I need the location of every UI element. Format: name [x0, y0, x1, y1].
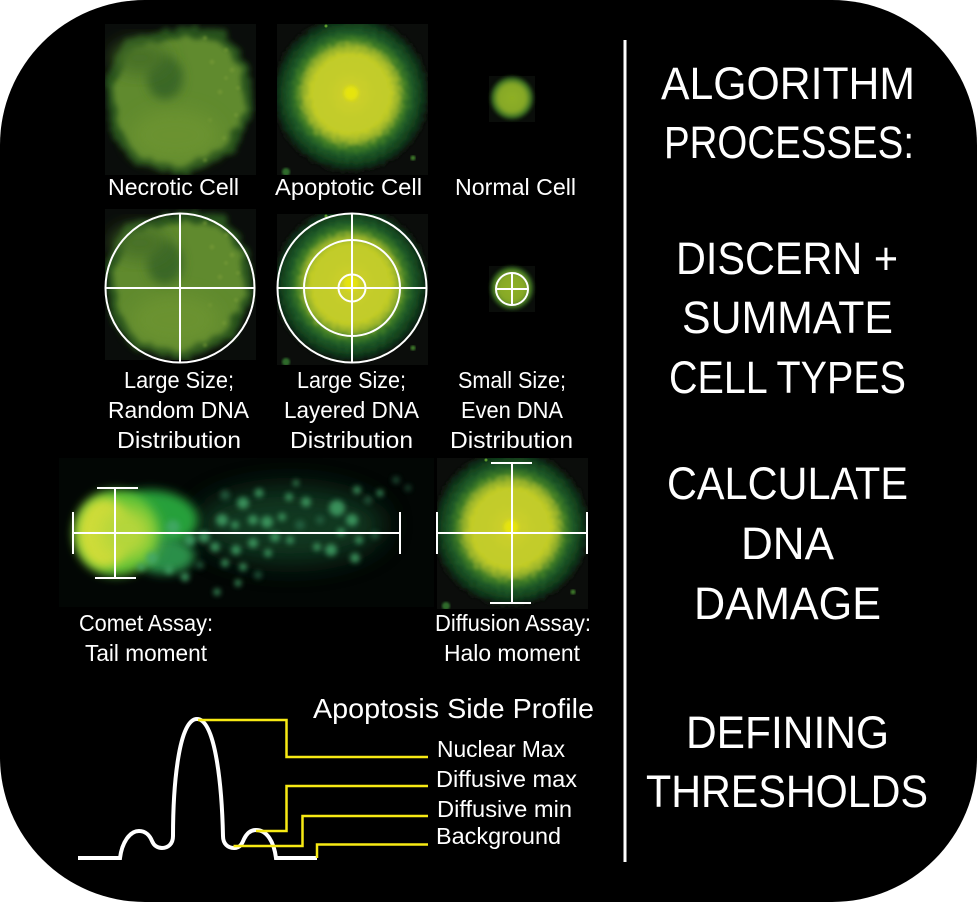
image: apoptotic cell: [272, 15, 430, 176]
caption: even DNA distribution: Distribution: [450, 427, 573, 453]
image: normal cell: [489, 76, 535, 122]
heading: algorithm processes: ALGORITHM: [661, 58, 915, 109]
diagram: apoptotic cell with layered rings: [272, 205, 430, 366]
caption: layered DNA distribution: Large Size;: [297, 367, 406, 393]
text: calculate DNA damage: DAMAGE: [694, 578, 881, 629]
label: diffusive max: Diffusive max: [436, 766, 578, 792]
heading: algorithm processes: PROCESSES:: [664, 117, 914, 168]
label: background: Background: [436, 823, 561, 849]
caption: apoptotic cell: Apoptotic Cell: [275, 174, 422, 200]
caption: layered DNA distribution: Distribution: [290, 427, 413, 453]
caption: even DNA distribution: [450, 367, 573, 453]
caption: necrotic cell: Necrotic Cell: [108, 174, 239, 200]
image: diffusion assay with halo moment measure: [432, 449, 590, 610]
vertical divider: [624, 40, 626, 862]
caption: comet assay: [79, 610, 213, 666]
diagram: normal cell with even overlay: [489, 266, 535, 312]
chart: apoptosis side profile curve: [78, 719, 317, 858]
heading: algorithm processes: [661, 58, 915, 168]
label: diffusive min: Diffusive min: [437, 796, 572, 822]
caption: comet assay: Tail moment: [85, 640, 208, 666]
caption: random DNA distribution: Distribution: [117, 427, 241, 453]
caption: diffusion assay: Diffusion Assay:: [435, 610, 591, 636]
callout lines: profile levels: [198, 720, 428, 858]
text: discern and summate cell types: SUMMATE: [682, 292, 893, 343]
caption: layered DNA distribution: Layered DNA: [284, 397, 420, 423]
image: comet assay with tail moment measure: [64, 467, 414, 600]
diagram: necrotic cell with quadrant overlay: [105, 209, 256, 362]
caption: normal cell: Normal Cell: [455, 174, 576, 200]
text: defining thresholds: THRESHOLDS: [646, 766, 928, 817]
caption: layered DNA distribution: [284, 367, 420, 453]
image: necrotic cell: [105, 24, 256, 176]
caption: even DNA distribution: Even DNA: [461, 397, 564, 423]
caption: random DNA distribution: [108, 367, 250, 453]
caption: random DNA distribution: Large Size;: [124, 367, 234, 393]
text: calculate DNA damage: CALCULATE: [667, 458, 908, 509]
caption: diffusion assay: Halo moment: [444, 640, 581, 666]
label: nuclear max: Nuclear Max: [437, 736, 565, 762]
text: discern and summate cell types: CELL TYPES: [669, 352, 906, 403]
text: calculate DNA damage: [667, 458, 908, 629]
caption: comet assay: Comet Assay:: [79, 610, 213, 636]
heading: apoptosis side profile: Apoptosis Side Profile: [313, 693, 594, 724]
caption: even DNA distribution: Small Size;: [458, 367, 566, 393]
text: calculate DNA damage: DNA: [741, 518, 834, 569]
text: defining thresholds: DEFINING: [686, 707, 889, 758]
text: defining thresholds: [646, 707, 928, 817]
caption: random DNA distribution: Random DNA: [108, 397, 250, 423]
caption: diffusion assay: [435, 610, 591, 666]
text: discern and summate cell types: DISCERN +: [676, 233, 898, 284]
text: discern and summate cell types: [669, 233, 906, 403]
